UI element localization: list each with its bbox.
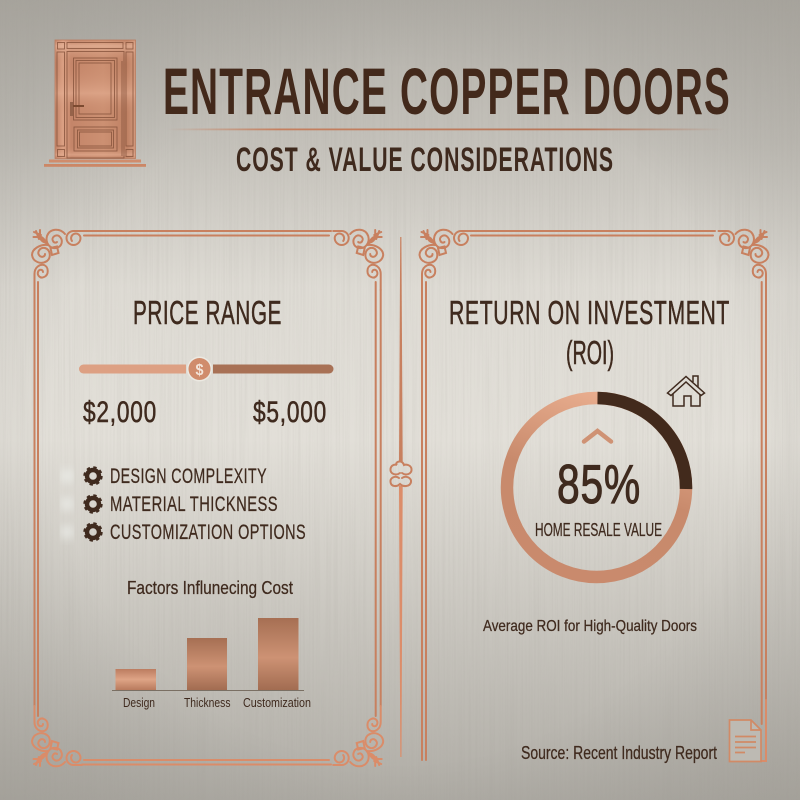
chart title: Factors Influnecing Cost [127,578,293,598]
price slider: $ [196,362,204,379]
cost factor list: CUSTOMIZATION OPTIONS [110,521,306,544]
icon: copper door [55,40,136,158]
icon: house [668,376,704,406]
bar chart: Design [123,695,155,710]
ROI caption: Average ROI for High-Quality Doors [483,618,697,635]
panel: price range frame [32,230,383,766]
panel: ROI frame [420,230,768,761]
price high: $5,000 [253,396,327,429]
center divider [390,237,412,757]
heading: price range: PRICE RANGE [133,294,282,331]
cost factor list: MATERIAL THICKNESS [110,493,278,516]
icon: up chevron [584,431,611,442]
cost factor list: DESIGN COMPLEXITY [110,465,267,488]
donut label: HOME RESALE VALUE [535,520,662,540]
faint glow markers [61,470,73,538]
bar chart: Thickness [184,695,231,710]
price slider [79,356,334,382]
bar chart: Customization [243,695,311,710]
price low: $2,000 [83,396,157,429]
icon: document [730,720,761,762]
panel: price range [61,294,334,710]
cost factor list [85,465,306,544]
bar chart [112,618,311,710]
heading: ROI abbreviation: (ROI) [566,334,614,371]
decorative title rule [167,128,725,130]
donut chart: 85% [507,398,686,577]
icon: door steps [44,160,146,167]
source: Source: Recent Industry Report [521,743,717,763]
value: 85%: 85% [557,453,641,515]
panel: ROI [449,294,761,763]
